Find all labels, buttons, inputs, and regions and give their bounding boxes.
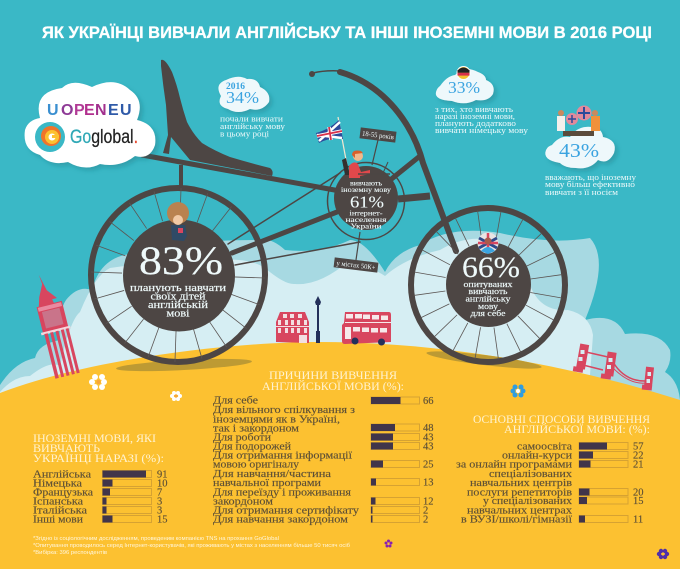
stat: 61%: вивчають bbox=[350, 178, 383, 188]
callout: 33% bbox=[435, 66, 528, 135]
heading: methods: ОСНОВНІ СПОСОБИ ВИВЧЕННЯ bbox=[473, 412, 650, 426]
building bbox=[276, 312, 309, 343]
stat: 66%: мову bbox=[478, 301, 499, 311]
bar chart: methods: 57 bbox=[633, 442, 644, 452]
bar chart: reasons: Для переїзду і проживання bbox=[213, 488, 351, 498]
footnotes bbox=[33, 536, 350, 556]
stat: 83%: 83% bbox=[139, 238, 223, 283]
heading: reasons bbox=[262, 368, 404, 393]
bar chart: languages: 7 bbox=[157, 488, 162, 498]
sign: cities bbox=[334, 232, 378, 273]
bar chart: reasons: мовою оригіналу bbox=[213, 460, 300, 470]
flower: purple small bbox=[384, 540, 392, 548]
icon: german flag bbox=[456, 66, 470, 80]
bar chart: reasons: закордоном bbox=[213, 496, 273, 508]
callout: 43%: вважають, що іноземну bbox=[545, 173, 636, 182]
bar chart: languages: 3 bbox=[157, 496, 162, 508]
flower: blue bbox=[510, 384, 526, 398]
bar chart: methods: самоосвіта bbox=[517, 442, 572, 452]
heading: reasons: АНГЛІЙСЬКОЇ МОВИ (%): bbox=[262, 379, 404, 393]
bar chart: methods: спеціалізованих bbox=[489, 469, 573, 480]
footnotes: *Опитування проводилось серед Інтернет-користувачів, які проживають у містах з населенням більше 50 тисяч осіб bbox=[33, 543, 350, 549]
bar chart: languages: 15 bbox=[157, 514, 168, 526]
heading: foreign languages: ВИВЧАЮТЬ bbox=[33, 441, 100, 455]
stat: 66%: вивчають bbox=[468, 286, 508, 296]
bar chart: reasons: Для подорожей bbox=[213, 442, 291, 452]
bar chart: reasons: Для отримання інформації bbox=[213, 450, 352, 462]
bicycle seat bbox=[161, 60, 273, 176]
callout: 34%: почали вивчати bbox=[220, 114, 284, 124]
stat: 83%: планують навчати bbox=[130, 283, 227, 294]
center hub bbox=[328, 162, 404, 240]
stat: 66%: англійську bbox=[466, 294, 511, 304]
callout: 34%: 2016 bbox=[226, 81, 246, 91]
uopeneu wordmark: E bbox=[84, 102, 95, 119]
heading: reasons: ПРИЧИНИ ВИВЧЕННЯ bbox=[269, 368, 397, 382]
icon: man at laptop bbox=[338, 117, 390, 178]
bar chart: methods bbox=[456, 442, 644, 526]
bar chart: reasons: Для себе bbox=[213, 396, 258, 406]
bar chart: methods: в ВУЗІ/школі/гімназії bbox=[461, 514, 572, 526]
uopeneu wordmark: N bbox=[95, 102, 107, 119]
bar chart: reasons: 43 bbox=[423, 432, 434, 444]
sign: cities: у містах 50К+ bbox=[336, 259, 376, 272]
bar chart: methods: 20 bbox=[633, 488, 644, 498]
stat: 61%: іноземну мову bbox=[341, 185, 391, 194]
uopeneu wordmark: U bbox=[47, 102, 59, 119]
flower: white large bbox=[89, 374, 107, 390]
callout: 33%: вивчати німецьку мову bbox=[435, 126, 528, 135]
sign: age: 18-55 років bbox=[362, 130, 395, 141]
callout: 33%: наразі іноземні мови, bbox=[435, 112, 515, 121]
stat: 83%: англійській bbox=[148, 300, 209, 311]
stat: 66%: 66% bbox=[462, 251, 520, 284]
heading: methods bbox=[473, 412, 650, 436]
bar chart: methods: 11 bbox=[633, 514, 643, 526]
bar chart: methods: навчальних центрів bbox=[470, 478, 572, 489]
bar chart: reasons: Для роботи bbox=[213, 432, 271, 444]
bar chart: reasons: 48 bbox=[423, 423, 434, 434]
callout: 43%: вивчати з її носієм bbox=[545, 188, 618, 197]
bar chart: methods: 15 bbox=[633, 496, 644, 507]
footnotes: *Згідно із соціологічним дослідженням, проведеним компанією TNS на прохання GoGlobal bbox=[33, 536, 279, 542]
uopeneu wordmark: U bbox=[120, 102, 132, 119]
street lamp bbox=[315, 296, 321, 343]
bar chart: reasons: 25 bbox=[423, 460, 434, 470]
heading: methods: АНГЛІЙСЬКОЇ МОВИ: (%): bbox=[504, 422, 650, 436]
bar chart: reasons: 2 bbox=[423, 506, 428, 516]
sign: age bbox=[359, 127, 397, 165]
bar chart: languages: 91 bbox=[157, 470, 168, 480]
stat: 66%: для себе bbox=[470, 308, 506, 318]
background clouds bbox=[0, 231, 680, 420]
bar chart: languages: Інші мови bbox=[33, 514, 83, 526]
bar chart: reasons: Для отримання сертифікату bbox=[213, 506, 360, 516]
bar chart: methods: у спеціалізованих bbox=[483, 496, 573, 507]
bar chart: languages bbox=[33, 470, 168, 526]
bar chart: methods: послуги репетиторів bbox=[467, 488, 572, 498]
bar chart: methods: за онлайн програмами bbox=[456, 460, 572, 470]
panel: methods bbox=[456, 412, 650, 526]
bar chart: languages: Іспанська bbox=[33, 496, 83, 508]
bar chart: languages: 3 bbox=[157, 506, 162, 516]
bar chart: reasons: так і закордоном bbox=[213, 424, 299, 434]
uopeneu wordmark: O bbox=[61, 102, 73, 119]
panel: reasons bbox=[213, 368, 434, 526]
goglobal logo: Goglobal. bbox=[70, 127, 138, 148]
callout: 33%: 33% bbox=[448, 78, 480, 97]
callout: 33%: планують додатково bbox=[435, 119, 516, 128]
callout: 34% bbox=[218, 77, 285, 138]
flower: white small bbox=[170, 391, 182, 401]
bar chart: reasons: 43 bbox=[423, 442, 434, 452]
logo cloud bbox=[25, 82, 155, 168]
heading: foreign languages bbox=[33, 431, 164, 465]
bicycle frame bbox=[142, 71, 456, 265]
bar chart: reasons: Для навчання/частина bbox=[213, 469, 331, 480]
rear wheel bbox=[91, 188, 265, 362]
title: ЯК УКРАЇНЦІ ВИВЧАЛИ АНГЛІЙСЬКУ ТА ІНШІ ІНОЗЕМНІ МОВИ В 2016 РОЦІ bbox=[42, 23, 652, 42]
handlebar grip bbox=[309, 71, 315, 77]
uopeneu wordmark: E bbox=[108, 102, 119, 119]
stat: 61%: населення bbox=[346, 215, 387, 224]
bar chart: reasons: навчальної програми bbox=[213, 478, 321, 489]
stat: 61%: 61% bbox=[350, 192, 384, 212]
bar chart: reasons: 2 bbox=[423, 514, 428, 526]
bar chart: reasons: Для навчання закордоном bbox=[213, 514, 348, 526]
bar chart: languages: Французька bbox=[33, 488, 93, 498]
callout: 34%: 34% bbox=[226, 88, 259, 107]
stat: 83% bbox=[130, 238, 227, 320]
stat: 83%: мові bbox=[166, 308, 190, 320]
callout: 43%: мову більш ефективно bbox=[545, 180, 635, 189]
stat: 66%: опитуваних bbox=[464, 279, 513, 289]
bar chart: languages: Англійська bbox=[33, 470, 91, 480]
bar chart: reasons bbox=[213, 396, 434, 526]
bar chart: reasons: 13 bbox=[423, 478, 434, 488]
stat: 83%: своїх дітей bbox=[150, 292, 206, 302]
uopeneu wordmark: P bbox=[74, 102, 85, 119]
stat: 61%: України bbox=[350, 222, 382, 230]
double-decker bus bbox=[342, 312, 391, 346]
stat: 61% bbox=[341, 178, 391, 230]
callout: 33%: з тих, хто вивчають bbox=[435, 105, 513, 114]
stat: 66% bbox=[462, 251, 520, 318]
bar chart: reasons: іноземцями як в Україні, bbox=[213, 414, 340, 426]
heading: foreign languages: УКРАЇНЦІ НАРАЗІ (%): bbox=[33, 451, 164, 465]
bar chart: reasons: 12 bbox=[423, 496, 434, 508]
stat: 61%: інтернет- bbox=[350, 208, 383, 218]
wheel shadows bbox=[116, 348, 542, 374]
callout: 43%: 43% bbox=[559, 140, 599, 162]
icon: reading child bbox=[167, 202, 189, 241]
callout: 43% bbox=[545, 106, 636, 197]
bar chart: languages: Німецька bbox=[33, 478, 82, 490]
footnotes: *Вибірка: 396 респондентів bbox=[33, 550, 107, 556]
callout: 34%: англійську мову bbox=[220, 122, 285, 131]
tower bridge bbox=[573, 344, 654, 391]
bar chart: methods: онлайн-курси bbox=[502, 450, 572, 462]
bar chart: methods: навчальних центрах bbox=[467, 506, 573, 516]
ground bbox=[0, 342, 680, 569]
bar chart: languages: Італійська bbox=[33, 506, 87, 516]
bar chart: languages: 10 bbox=[157, 478, 168, 490]
front wheel bbox=[411, 208, 565, 362]
icon: two people talking bbox=[557, 106, 600, 136]
panel: foreign languages bbox=[33, 431, 168, 526]
flower: purple bbox=[657, 549, 669, 559]
bar chart: reasons: 66 bbox=[423, 396, 434, 407]
callout: 34%: в цьому році bbox=[220, 130, 270, 138]
heading: foreign languages: ІНОЗЕМНІ МОВИ, ЯКІ bbox=[33, 431, 156, 445]
bar chart: methods: 22 bbox=[633, 450, 644, 462]
big ben bbox=[27, 270, 82, 379]
icon: british flag bbox=[316, 120, 343, 143]
bar chart: reasons: Для вільного спілкування з bbox=[213, 405, 355, 416]
icon: teacher with british flag bbox=[478, 232, 498, 254]
bar chart: methods: 21 bbox=[633, 460, 644, 470]
